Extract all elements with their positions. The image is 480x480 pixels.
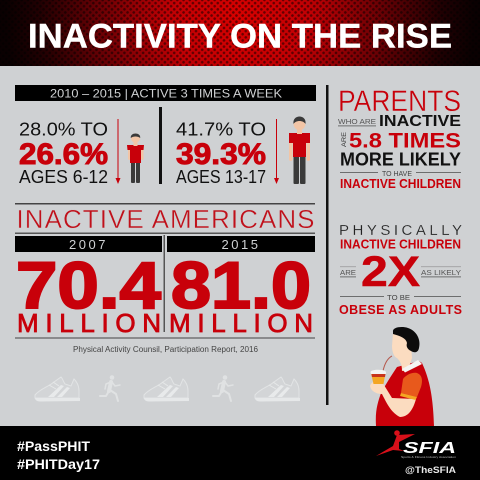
text: more likely: MORE LIKELY: [340, 150, 461, 170]
column: 2015: [167, 236, 315, 338]
column: 2015: 81.0: [171, 248, 311, 322]
panel: inactive americans: [15, 203, 315, 354]
subheading bar: 2010 – 2015 | ACTIVE 3 TIMES A WEEK: [50, 86, 282, 100]
decorative row: shoes and runners: [35, 375, 300, 402]
text: who are inactive: WHO ARE: [338, 117, 376, 126]
text: to be: TO BE: [387, 293, 410, 302]
column divider: [164, 235, 165, 332]
vertical divider: [326, 85, 328, 405]
icon: shoe 3: [255, 377, 300, 402]
stat: ages 13-17: AGES 13-17: [176, 166, 266, 187]
sleeve band: [400, 393, 417, 400]
handle: @TheSFIA: [405, 465, 456, 476]
column: 2007: [15, 236, 162, 338]
arrow: down 13-17: [274, 119, 279, 184]
column: 2015: 2015: [222, 237, 260, 252]
arm: [370, 381, 416, 417]
logo: SFIA: [376, 430, 457, 459]
column: 2015: MILLION: [169, 308, 313, 338]
collar: [402, 360, 422, 372]
body: [376, 361, 434, 426]
text: who are inactive: INACTIVE: [379, 113, 461, 130]
divider: [159, 107, 162, 184]
icon: runner 1: [100, 375, 120, 401]
stat: ages 6-12: AGES 6-12: [19, 166, 108, 187]
text: who are inactive: [338, 113, 461, 130]
arrow: down 6-12: [116, 119, 120, 184]
hashtags: #PHITDay17: [17, 457, 100, 472]
subheading bar: [15, 85, 316, 101]
text: are 5.8 times: 5.8 TIMES: [349, 130, 461, 152]
text: to have: TO HAVE: [382, 169, 412, 178]
stat: ages 6-12: [19, 118, 108, 187]
heading: parents: PARENTS: [338, 85, 461, 118]
source note: Physical Activity Counsil, Participation Report, 2016: [73, 345, 259, 354]
stat: ages 13-17: [176, 118, 266, 187]
icon: child: [127, 133, 144, 183]
column: 2007: 2007: [69, 237, 108, 252]
panel: parents: [338, 85, 461, 191]
text: obese as adults: OBESE AS ADULTS: [339, 303, 462, 317]
text: are: ARE: [340, 268, 356, 277]
stat: ages 6-12: 26.6%: [19, 138, 108, 171]
column: 2007: MILLION: [17, 308, 161, 338]
stat: ages 13-17: 39.3%: [176, 138, 266, 171]
icon: shoe 1: [35, 377, 80, 402]
hair: [393, 327, 420, 352]
text: inactive children: INACTIVE CHILDREN: [340, 238, 461, 252]
illustration: man drinking soda: [370, 327, 434, 426]
icon: shoe 2: [144, 377, 189, 402]
text: as likely: AS LIKELY: [421, 268, 461, 277]
stat: ages 13-17: 41.7% TO: [176, 118, 266, 140]
column: 2007: 70.4: [16, 248, 161, 322]
neck and face: [392, 333, 412, 371]
cup: [371, 373, 386, 384]
icon: runner 2: [213, 375, 233, 401]
logo: SFIA: Sports & Fitness Industry Association: [401, 455, 457, 459]
text: inactive children: INACTIVE CHILDREN: [340, 177, 461, 191]
hashtags: [17, 439, 100, 472]
straw: [383, 356, 392, 371]
cup band: [372, 374, 386, 377]
footer bar: [0, 426, 480, 480]
icon: teen: [289, 116, 310, 184]
header banner: [0, 0, 480, 66]
sleeve: [401, 373, 422, 397]
heading: INACTIVE AMERICANS: [16, 204, 314, 234]
title: INACTIVITY ON THE RISE: [28, 18, 452, 56]
heading: physically: PHYSICALLY: [339, 222, 462, 239]
hashtags: #PassPHIT: [17, 439, 91, 454]
text: are 5.8 times: ARE: [341, 131, 348, 147]
panel: active 3 times a week: [15, 85, 316, 187]
cup lid: [370, 370, 386, 374]
stat: ages 6-12: 28.0% TO: [19, 118, 108, 140]
logo: SFIA: SFIA: [403, 440, 456, 457]
stat: 2X: 2X: [361, 248, 420, 296]
panel: physically inactive children: [339, 222, 462, 317]
